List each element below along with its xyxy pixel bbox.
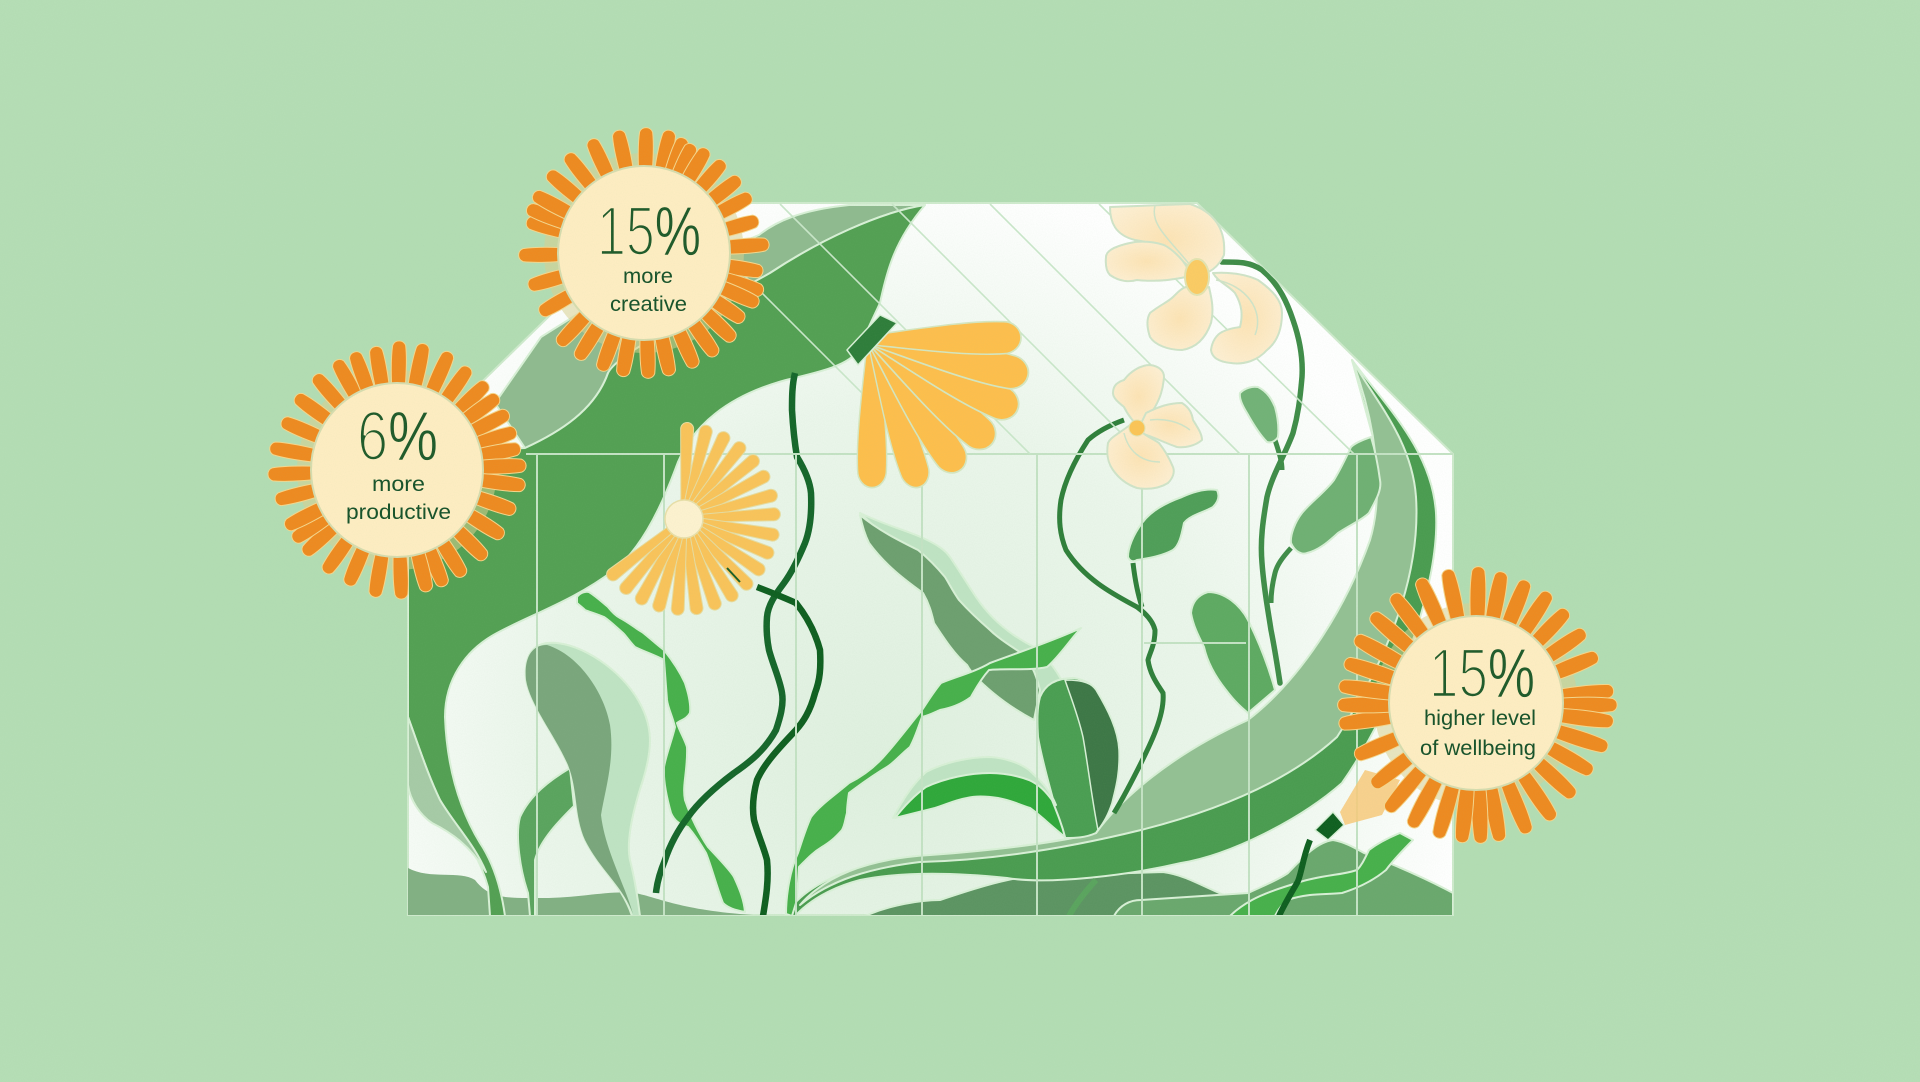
plants inside greenhouse: [408, 205, 1453, 916]
value: 15%: [1429, 634, 1535, 712]
flower: hidden orange bud with sepal: [1315, 770, 1400, 840]
disc: [558, 166, 730, 340]
large left swoosh leaf: [408, 205, 925, 916]
two-tone leaf dark half: [1065, 680, 1119, 830]
leaf light edge left: [526, 643, 650, 916]
stem branch right: [1271, 548, 1291, 603]
sepal: [847, 315, 897, 365]
stat flower: 15% more creative: [518, 127, 770, 379]
two-tone leaf: [1037, 678, 1119, 838]
label line 1: higher level: [1424, 707, 1536, 730]
value: 6%: [357, 397, 438, 475]
bright vine leaf: [577, 592, 745, 912]
label line 1: more: [372, 473, 425, 496]
label line 2: of wellbeing: [1420, 737, 1536, 760]
grey-green leaf: [860, 515, 1040, 720]
value: 15%: [597, 192, 701, 270]
stat flower: 15% higher level of wellbeing: [1338, 566, 1617, 844]
thin stem under swoosh: [1069, 880, 1096, 916]
large right leaf: [1291, 437, 1380, 554]
stem leaf to curl: [1133, 563, 1142, 607]
ground left: [408, 868, 753, 915]
petals: [518, 127, 770, 379]
greenhouse glazing bars: [526, 204, 1453, 915]
greenhouse illustration: [408, 203, 1453, 916]
ground right: [1114, 840, 1453, 916]
lower right leaf: [1191, 592, 1275, 713]
wavy bright leaf centre: [786, 628, 1081, 916]
petals: [268, 341, 526, 599]
small leaf upper: [1240, 387, 1278, 442]
leaf dark left: [526, 645, 633, 914]
right big swoosh light band: [800, 360, 1416, 905]
stat flower: 6% more productive: [268, 341, 526, 599]
right big swoosh dark: [785, 360, 1436, 916]
petals: [1338, 566, 1617, 844]
left lower band: [408, 717, 486, 872]
flower: fan-shaped orange: [847, 315, 1032, 492]
back leaf left: [518, 768, 574, 916]
label line 1: more: [623, 265, 673, 288]
dark stem second: [753, 587, 820, 916]
ground dark: [865, 872, 1224, 916]
grey-green leaf light edge: [860, 513, 1066, 700]
label line 2: creative: [610, 293, 687, 316]
flower: large cream: [1106, 204, 1282, 363]
middle right leaf: [1128, 489, 1218, 561]
flower: small cream: [1107, 365, 1202, 489]
curly stem centre right: [1060, 420, 1163, 813]
greenhouse body: [408, 203, 1453, 915]
sepal short line on daisy: [727, 568, 740, 582]
stem right tall: [1222, 262, 1302, 683]
flower: daisy pale orange: [604, 422, 781, 616]
upper band leaf: [495, 205, 925, 448]
label line 2: productive: [346, 501, 451, 524]
dark stem long: [656, 373, 811, 893]
disc: [1389, 616, 1563, 790]
stem bottom right: [1279, 840, 1310, 916]
bright leaf lower light edge: [893, 757, 1056, 818]
stem short right: [1275, 440, 1282, 470]
bright leaf bottom right: [1230, 833, 1413, 916]
bright leaf lower: [895, 773, 1065, 837]
petals: [857, 321, 1032, 492]
disc: [311, 383, 483, 557]
